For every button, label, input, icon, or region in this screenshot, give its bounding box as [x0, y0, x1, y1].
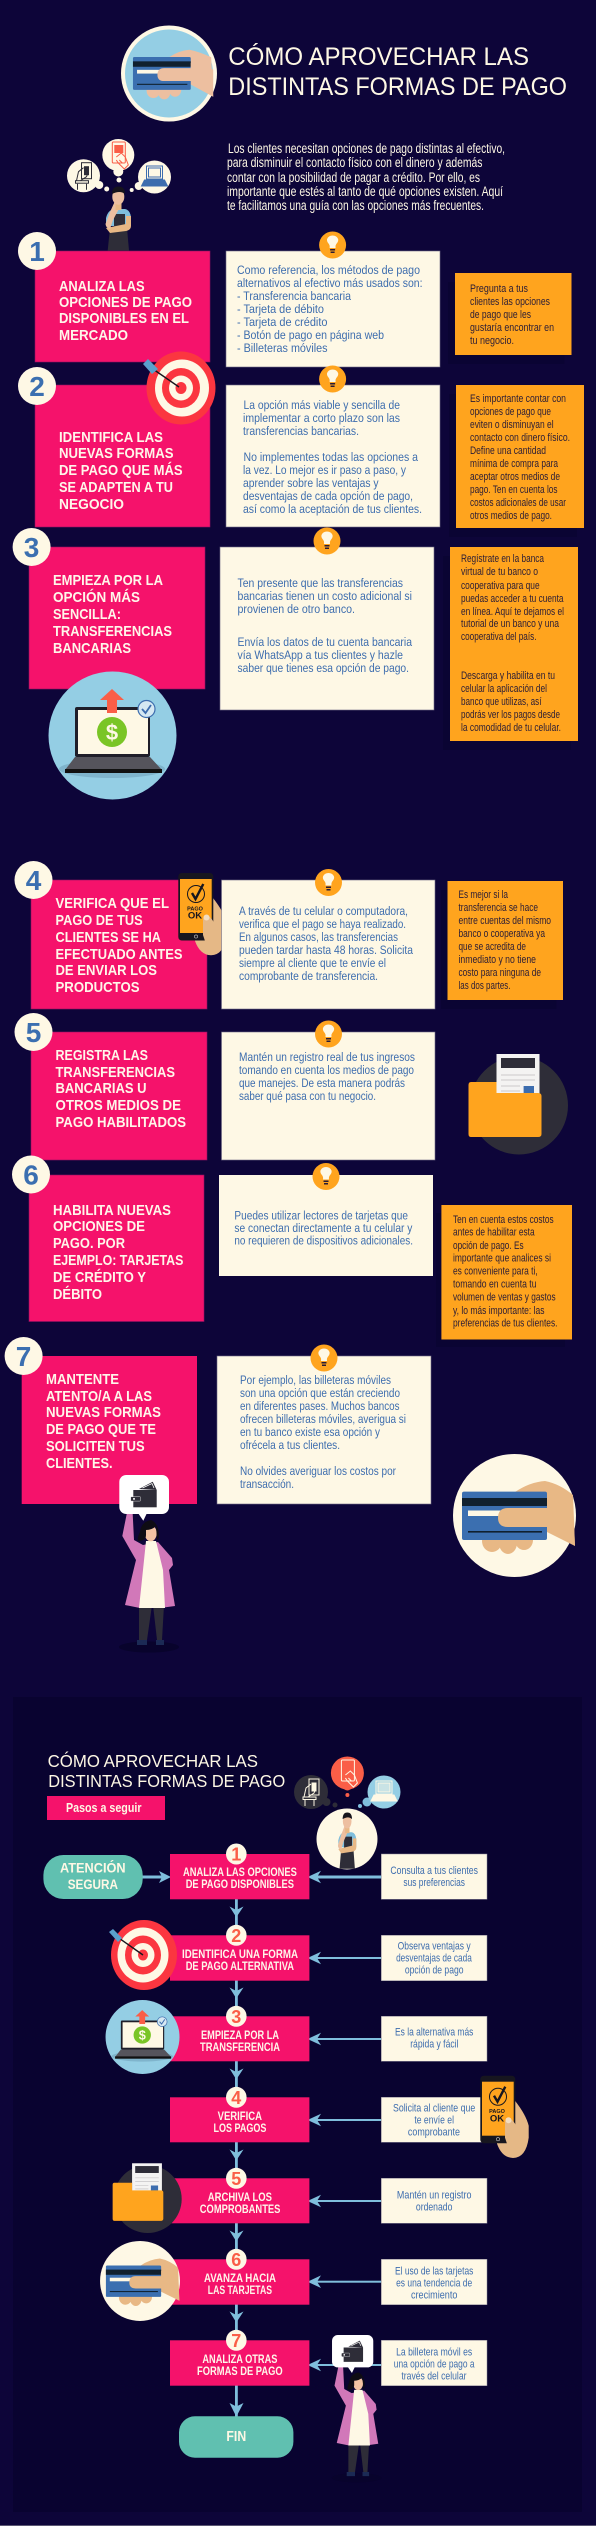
- flow step 1: [170, 1854, 309, 1899]
- note 3: Es la alternativa más: [395, 2026, 473, 2038]
- icon: phone pago ok small: OK: [490, 2113, 504, 2124]
- callout: tip 3: Descarga y habilita en tu: [461, 670, 555, 682]
- panel: tip 3: Envía los datos de tu cuenta bancaria: [238, 635, 412, 649]
- heading: DE ENVIAR LOS: [56, 962, 157, 979]
- heading: SOLICITEN TUS: [46, 1438, 145, 1455]
- panel: tip 1: - Tarjeta de débito: [237, 302, 324, 316]
- icon: phone pago ok: [178, 873, 227, 955]
- number 7: [5, 1337, 43, 1375]
- number 4: 4: [26, 865, 42, 896]
- callout: tip 4: banco o cooperativa ya: [458, 928, 546, 940]
- panel: tip 1: - Billeteras móviles: [237, 341, 328, 355]
- note 1: Consulta a tus clientes: [390, 1865, 478, 1877]
- panel: tip 3: [220, 547, 434, 710]
- callout: tip 2: otros medios de pago.: [470, 510, 552, 522]
- number 4: [14, 861, 52, 899]
- intro text: [227, 141, 505, 213]
- heading: OPCIONES DE PAGO: [59, 294, 192, 311]
- panel: tip 4: siempre al cliente que te envíe el: [239, 956, 386, 970]
- callout: tip 3: cooperativa para que: [461, 580, 540, 592]
- callout: tip 2: costos adicionales de usar: [470, 497, 566, 509]
- number 1: [18, 232, 56, 270]
- callout: tip 6: y, lo más importante: las: [453, 1305, 545, 1317]
- callout: tip 3: tutorial de un banco y una: [461, 618, 560, 630]
- callout: tip 1: gustaría encontrar en: [470, 322, 554, 334]
- panel: step 4: [31, 880, 207, 1009]
- panel: tip 5: saber qué pasa con tu negocio.: [239, 1089, 376, 1103]
- panel: tip 2: aprender sobre las ventajas y: [243, 476, 379, 490]
- callout: tip 3: banco que utilizas, así: [461, 696, 542, 708]
- icon: woman with wallet: [119, 1475, 179, 1652]
- heading: NUEVAS FORMAS: [59, 445, 174, 462]
- heading: [53, 572, 172, 657]
- callout: tip 2: [449, 385, 584, 537]
- callout: tip 2: opciones de pago que: [470, 406, 551, 418]
- callout: tip 6: volumen de ventas y gastos: [453, 1292, 556, 1304]
- heading: SENCILLA:: [53, 606, 121, 623]
- icon: person thinking: [106, 186, 131, 250]
- heading: IDENTIFICA LAS: [59, 429, 163, 446]
- note 5: [381, 2178, 487, 2223]
- heading: [56, 895, 182, 996]
- panel: tip 7: en diferentes pases. Muchos bancos: [240, 1399, 400, 1413]
- atención segura pill: [43, 1855, 143, 1899]
- icon: bulb 5: [315, 1020, 342, 1048]
- heading: REGISTRA LAS: [56, 1047, 148, 1064]
- callout: tip 1: tu negocio.: [470, 335, 514, 347]
- flow step 7: ANALIZA OTRAS: [202, 2354, 278, 2366]
- panel: tip 4: [222, 880, 435, 1009]
- panel: tip 5: tomando en cuenta los medios de pago: [239, 1063, 414, 1077]
- callout: tip 3: virtual de tu banco o: [461, 566, 538, 578]
- icon: folder with document: [468, 1054, 568, 1154]
- panel: tip 7: Por ejemplo, las billeteras móviles: [240, 1373, 391, 1387]
- icon: card in hand: [331, 1756, 364, 1790]
- callout: tip 1: [448, 273, 572, 364]
- heading: [46, 1371, 161, 1472]
- panel: step 2: [35, 385, 210, 527]
- icon: bulb 4: [315, 869, 342, 896]
- panel: tip 1: [226, 251, 440, 367]
- flow step 7: [170, 2340, 309, 2386]
- callout: tip 1: Pregunta a tus: [470, 283, 528, 295]
- note 2: opción de pago: [405, 1965, 464, 1977]
- number 2: 2: [29, 371, 45, 402]
- panel: step 3: [29, 547, 205, 689]
- callout: tip 3: podrás ver los pagos desde: [461, 709, 560, 721]
- note 7: través del celular: [401, 2370, 467, 2382]
- thought bubbles: [67, 139, 171, 194]
- callout: tip 3: en línea. Aquí te dejamos el: [461, 606, 564, 618]
- title: [228, 42, 567, 101]
- callout: tip 4: Es mejor si la: [458, 889, 509, 901]
- flow step 3: [170, 2016, 309, 2061]
- note 3: rápida y fácil: [410, 2038, 458, 2050]
- panel: tip 7: [217, 1356, 431, 1504]
- callout: tip 4: que se acredita de: [458, 941, 526, 953]
- note 6: [381, 2259, 487, 2305]
- note 1: [381, 1854, 487, 1899]
- callout: tip 3: [443, 547, 578, 750]
- note 7: La billetera móvil es: [396, 2346, 472, 2358]
- flow numbers: 4: [231, 2088, 241, 2108]
- flow step 6: AVANZA HACIA: [204, 2273, 276, 2285]
- heading: [59, 278, 192, 344]
- heading: MERCADO: [59, 327, 128, 344]
- panel: tip 6: Puedes utilizar lectores de tarjetas que: [234, 1208, 408, 1222]
- icon: target: [143, 352, 216, 424]
- icon: bulb 7: [310, 1344, 338, 1372]
- panel: tip 1: - Transferencia bancaria: [237, 289, 351, 303]
- panel: tip 6: se conectan directamente a tu celular y: [234, 1221, 413, 1235]
- heading: DISPONIBLES EN EL: [59, 310, 189, 327]
- flow step 1: ANALIZA LAS OPCIONES: [183, 1867, 297, 1879]
- icon: phone pago ok: PAGO: [187, 906, 204, 912]
- panel: tip 1: - Tarjeta de crédito: [237, 315, 328, 329]
- number 7: 7: [16, 1341, 31, 1372]
- intro text: importante que estés al tanto de qué opciones existen. Aquí: [227, 184, 503, 199]
- callout: tip 3: celular la aplicación del: [461, 683, 547, 695]
- heading: PAGO DE TUS: [56, 912, 143, 929]
- flow numbers: [226, 1844, 247, 2351]
- flow numbers: 2: [231, 1926, 241, 1946]
- flow step 1: DE PAGO DISPONIBLES: [186, 1879, 294, 1891]
- flow step 3: TRANSFERENCIA: [200, 2042, 280, 2054]
- flow step 4: VERIFICA: [218, 2111, 262, 2123]
- icon: phone pago ok: OK: [188, 911, 202, 922]
- flow numbers: 6: [231, 2250, 241, 2270]
- icon: hand with banknote: [67, 159, 100, 192]
- callout: tip 2: aceptar otros medios de: [470, 471, 560, 483]
- flow numbers: 1: [231, 1844, 241, 1864]
- note 2: [381, 1935, 487, 1981]
- heading: BANCARIAS U: [56, 1080, 146, 1097]
- intro text: Los clientes necesitan opciones de pago distintas al efectivo,: [228, 141, 505, 156]
- icon: target small: [109, 1920, 177, 1990]
- icon: folder small: [113, 2163, 182, 2233]
- callout: tip 4: las dos partes.: [458, 980, 510, 992]
- callout: tip 2: mínima de compra para: [470, 458, 559, 470]
- icon: card in hand: [102, 139, 134, 171]
- number 5: [14, 1013, 52, 1051]
- flow numbers: 7: [231, 2331, 241, 2351]
- flowchart title: [48, 1750, 285, 1791]
- panel: tip 1: - Botón de pago en página web: [237, 328, 384, 342]
- heading: OTROS MEDIOS DE: [56, 1097, 181, 1114]
- note 6: El uso de las tarjetas: [395, 2265, 473, 2277]
- thought bubbles small: [294, 1756, 400, 1809]
- callout: tip 6: Ten en cuenta estos costos: [453, 1214, 554, 1226]
- heading: [59, 429, 183, 513]
- heading: [53, 1202, 183, 1303]
- arrow: inicio to step 1: [142, 1871, 171, 1883]
- note 7: [381, 2340, 487, 2386]
- note 2: Observa ventajas y: [398, 1940, 471, 1952]
- callout: tip 1: clientes las opciones: [470, 296, 550, 308]
- panel: tip 4: pueden tardar hasta 48 horas. Solicita: [239, 943, 413, 957]
- note 2: desventajas de cada: [396, 1953, 472, 1965]
- number 6: [12, 1156, 50, 1194]
- panel: tip 7: son una opción que están creciendo: [240, 1386, 400, 1400]
- panel: step 7: [22, 1356, 197, 1504]
- callout: tip 6: antes de habilitar esta: [453, 1227, 535, 1239]
- panel: tip 2: La opción más viable y sencilla de: [244, 398, 400, 412]
- note 6: crecimiento: [411, 2289, 457, 2301]
- heading: DÉBITO: [53, 1286, 102, 1303]
- panel: tip 5: [222, 1032, 435, 1160]
- panel: tip 4: verifica que el pago se haya realizado.: [239, 917, 406, 931]
- intro text: contar con la posibilidad de pagar a crédito. Por ello, es: [227, 170, 480, 185]
- heading: DE CRÉDITO Y: [53, 1269, 146, 1286]
- icon: hand holding card: [453, 1454, 576, 1577]
- icon: hand with banknote: [294, 1775, 328, 1809]
- heading: ATENTO/A A LAS: [46, 1388, 152, 1405]
- flow numbers: 5: [231, 2169, 241, 2189]
- callout: tip 3: puedas acceder a tu cuenta: [461, 593, 564, 605]
- badge: pasos a seguir: [47, 1796, 165, 1820]
- icon: laptop small: $: [139, 2028, 146, 2043]
- icon: header card in hand: [121, 26, 217, 122]
- callout: tip 2: Define una cantidad: [470, 445, 546, 457]
- panel: tip 7: ofrecen billeteras móviles, averigua si: [240, 1412, 406, 1426]
- panel: step 5: [31, 1032, 207, 1160]
- callout: tip 4: [441, 881, 563, 1009]
- callout: tip 6: tomando en cuenta tu: [453, 1279, 536, 1291]
- heading: CLIENTES SE HA: [56, 929, 161, 946]
- callout: tip 6: es conveniente para ti,: [453, 1266, 538, 1278]
- flow numbers: 3: [231, 2007, 241, 2027]
- heading: DE PAGO QUE TE: [46, 1421, 156, 1438]
- person in circle: [316, 1808, 378, 1870]
- flow step 6: [170, 2259, 309, 2305]
- number 1: 1: [29, 236, 45, 267]
- flow step 4: [170, 2097, 309, 2142]
- callout: tip 6: opción de pago. Es: [453, 1240, 524, 1252]
- panel: tip 3: vía WhatsApp a tus clientes y hazle: [238, 648, 403, 662]
- flow step 5: [170, 2178, 309, 2223]
- flowchart title: CÓMO APROVECHAR LAS: [48, 1750, 258, 1771]
- flow step 7: FORMAS DE PAGO: [197, 2366, 283, 2378]
- heading: ANALIZA LAS: [59, 278, 145, 295]
- panel: step 1: [35, 251, 210, 362]
- heading: [56, 1047, 186, 1131]
- note 7: una opción de pago a: [394, 2358, 475, 2370]
- callout: tip 3: cooperativa del país.: [461, 631, 536, 643]
- icon: laptop with dollar: $: [106, 720, 118, 745]
- panel: tip 4: comprobante de transferencia.: [239, 969, 378, 983]
- heading: PRODUCTOS: [56, 979, 140, 996]
- heading: VERIFICA QUE EL: [56, 895, 169, 912]
- icon: bulb 6: [312, 1163, 340, 1190]
- note 4: te envíe el: [414, 2114, 454, 2126]
- note 5: Mantén un registro: [397, 2189, 472, 2201]
- flow step 4: LOS PAGOS: [214, 2123, 267, 2135]
- flowchart title: DISTINTAS FORMAS DE PAGO: [48, 1771, 285, 1791]
- flow step 2: IDENTIFICA UNA FORMA: [182, 1949, 298, 1961]
- panel: tip 7: transacción.: [240, 1477, 294, 1491]
- icon: bulb 1: [319, 232, 346, 258]
- panel: tip 2: No implementes todas las opciones a: [244, 450, 418, 464]
- intro text: te facilitamos una guía con las opciones más frecuentes.: [227, 198, 484, 213]
- callout: tip 4: inmediato y no tiene: [458, 954, 536, 966]
- flow step 6: LAS TARJETAS: [208, 2285, 272, 2297]
- number 2: [18, 367, 56, 405]
- panel: tip 2: la vez. Lo mejor es ir paso a paso, y: [243, 463, 407, 477]
- panel: tip 7: ofrécela a tus clientes.: [240, 1438, 340, 1452]
- note 4: comprobante: [408, 2126, 460, 2138]
- panel: tip 2: [226, 385, 440, 527]
- heading: PAGO. POR: [53, 1235, 125, 1252]
- fin pill: [179, 2416, 293, 2458]
- number 5: 5: [26, 1017, 41, 1048]
- intro text: para disminuir el contacto físico con el dinero y además: [227, 155, 483, 170]
- panel: tip 6: [219, 1175, 433, 1276]
- panel: tip 4: En algunos casos, las transferencias: [239, 930, 398, 944]
- panel: tip 6: no requieren de dispositivos adicionales.: [234, 1234, 413, 1248]
- heading: MANTENTE: [46, 1371, 119, 1388]
- heading: EJEMPLO: TARJETAS: [53, 1252, 183, 1269]
- flow step 2: [170, 1935, 309, 1981]
- heading: NUEVAS FORMAS: [46, 1404, 161, 1421]
- callout: tip 3: la comodidad de tu celular.: [461, 722, 561, 734]
- flow step 3: EMPIEZA POR LA: [201, 2030, 279, 2042]
- panel: tip 5: Mantén un registro real de tus ingresos: [239, 1050, 415, 1064]
- heading: OPCIONES DE: [53, 1218, 145, 1235]
- heading: TRANSFERENCIAS: [56, 1064, 175, 1081]
- note 1: sus preferencias: [403, 1877, 465, 1889]
- icon: laptop small: [106, 2000, 180, 2074]
- heading: PAGO HABILITADOS: [56, 1114, 186, 1131]
- callout: tip 6: [436, 1205, 572, 1347]
- callout: tip 2: Es importante contar con: [470, 393, 566, 405]
- panel: tip 7: No olvides averiguar los costos por: [240, 1464, 396, 1478]
- arrows: vertical flow: [230, 1899, 244, 2417]
- panel: tip 2: así como la aceptación de tus clientes.: [243, 502, 422, 516]
- flow step 5: COMPROBANTES: [200, 2204, 281, 2216]
- note 3: [381, 2016, 487, 2061]
- number 3: 3: [24, 532, 39, 563]
- panel: tip 2: implementar a corto plazo son las: [243, 411, 400, 425]
- title: DISTINTAS FORMAS DE PAGO: [228, 73, 567, 101]
- arrows: from notes to steps: [308, 1871, 382, 2371]
- icon: phone pago ok small: PAGO: [489, 2109, 506, 2115]
- note 6: es una tendencia de: [396, 2277, 472, 2289]
- panel: tip 3: saber que tienes esa opción de pago.: [238, 661, 409, 675]
- heading: OPCIÓN MÁS: [53, 588, 140, 606]
- panel: flowchart background: [13, 1697, 582, 2512]
- icon: phone pago ok small: [480, 2076, 529, 2158]
- panel: tip 5: que manejes. De esta manera podrás: [239, 1076, 405, 1090]
- atención segura pill: ATENCIÓN: [60, 1861, 126, 1876]
- heading: HABILITA NUEVAS: [53, 1202, 171, 1219]
- panel: tip 2: desventajas de cada opción de pago,: [243, 489, 413, 503]
- callout: tip 1: de pago que les: [470, 309, 531, 321]
- heading: DE PAGO QUE MÁS: [59, 462, 183, 479]
- title: CÓMO APROVECHAR LAS: [228, 42, 529, 71]
- callout: tip 6: importante que analices si: [453, 1253, 551, 1265]
- panel: tip 1: alternativos al efectivo más usados son:: [237, 276, 422, 290]
- callout: tip 2: eviten o disminuyan el: [470, 419, 554, 431]
- callout: tip 2: contacto con dinero físico.: [470, 432, 570, 444]
- icon: bulb 2: [319, 366, 346, 392]
- number 6: 6: [23, 1160, 39, 1190]
- note 5: ordenado: [416, 2201, 452, 2213]
- heading: TRANSFERENCIAS: [53, 623, 172, 640]
- heading: NEGOCIO: [59, 496, 124, 513]
- atención segura pill: SEGURA: [68, 1877, 118, 1892]
- heading: EFECTUADO ANTES: [56, 946, 182, 963]
- icon: laptop with dollar: [48, 672, 176, 800]
- flow step 2: DE PAGO ALTERNATIVA: [186, 1961, 294, 1973]
- badge: pasos a seguir: Pasos a seguir: [66, 1800, 142, 1815]
- heading: BANCARIAS: [53, 640, 131, 657]
- heading: SE ADAPTEN A TU: [59, 479, 173, 496]
- number 3: [13, 528, 51, 566]
- callout: tip 6: preferencias de tus clientes.: [453, 1318, 558, 1330]
- flow step 5: ARCHIVA LOS: [208, 2192, 272, 2204]
- icon: bulb 3: [314, 528, 340, 554]
- icon: laptop: [138, 160, 171, 194]
- panel: tip 1: Como referencia, los métodos de pago: [237, 263, 420, 277]
- panel: tip 4: A través de tu celular o computadora,: [239, 904, 408, 918]
- callout: tip 3: Regístrate en la banca: [461, 553, 545, 565]
- panel: step 6: [29, 1175, 204, 1322]
- heading: CLIENTES.: [46, 1455, 113, 1472]
- panel: tip 2: transferencias bancarias.: [243, 424, 359, 438]
- panel: tip 3: Ten presente que las transferencias: [238, 576, 403, 590]
- note 4: [381, 2097, 487, 2142]
- panel: tip 3: provienen de otro banco.: [238, 602, 355, 616]
- icon: laptop: [368, 1776, 400, 1808]
- heading: EMPIEZA POR LA: [53, 572, 163, 589]
- callout: tip 2: pago. Ten en cuenta los: [470, 484, 558, 496]
- fin pill: FIN: [226, 2429, 246, 2445]
- callout: tip 4: costo para ninguna de: [458, 967, 541, 979]
- callout: tip 4: entre cuentas del mismo: [458, 915, 551, 927]
- panel: tip 7: en tu banco existe esa opción y: [240, 1425, 381, 1439]
- icon: woman with wallet small: [332, 2335, 382, 2482]
- callout: tip 4: transferencia se hace: [458, 902, 538, 914]
- icon: hand with card small: [100, 2241, 180, 2321]
- panel: tip 3: bancarias tienen un costo adicional si: [238, 589, 412, 603]
- note 4: Solicita al cliente que: [393, 2102, 475, 2114]
